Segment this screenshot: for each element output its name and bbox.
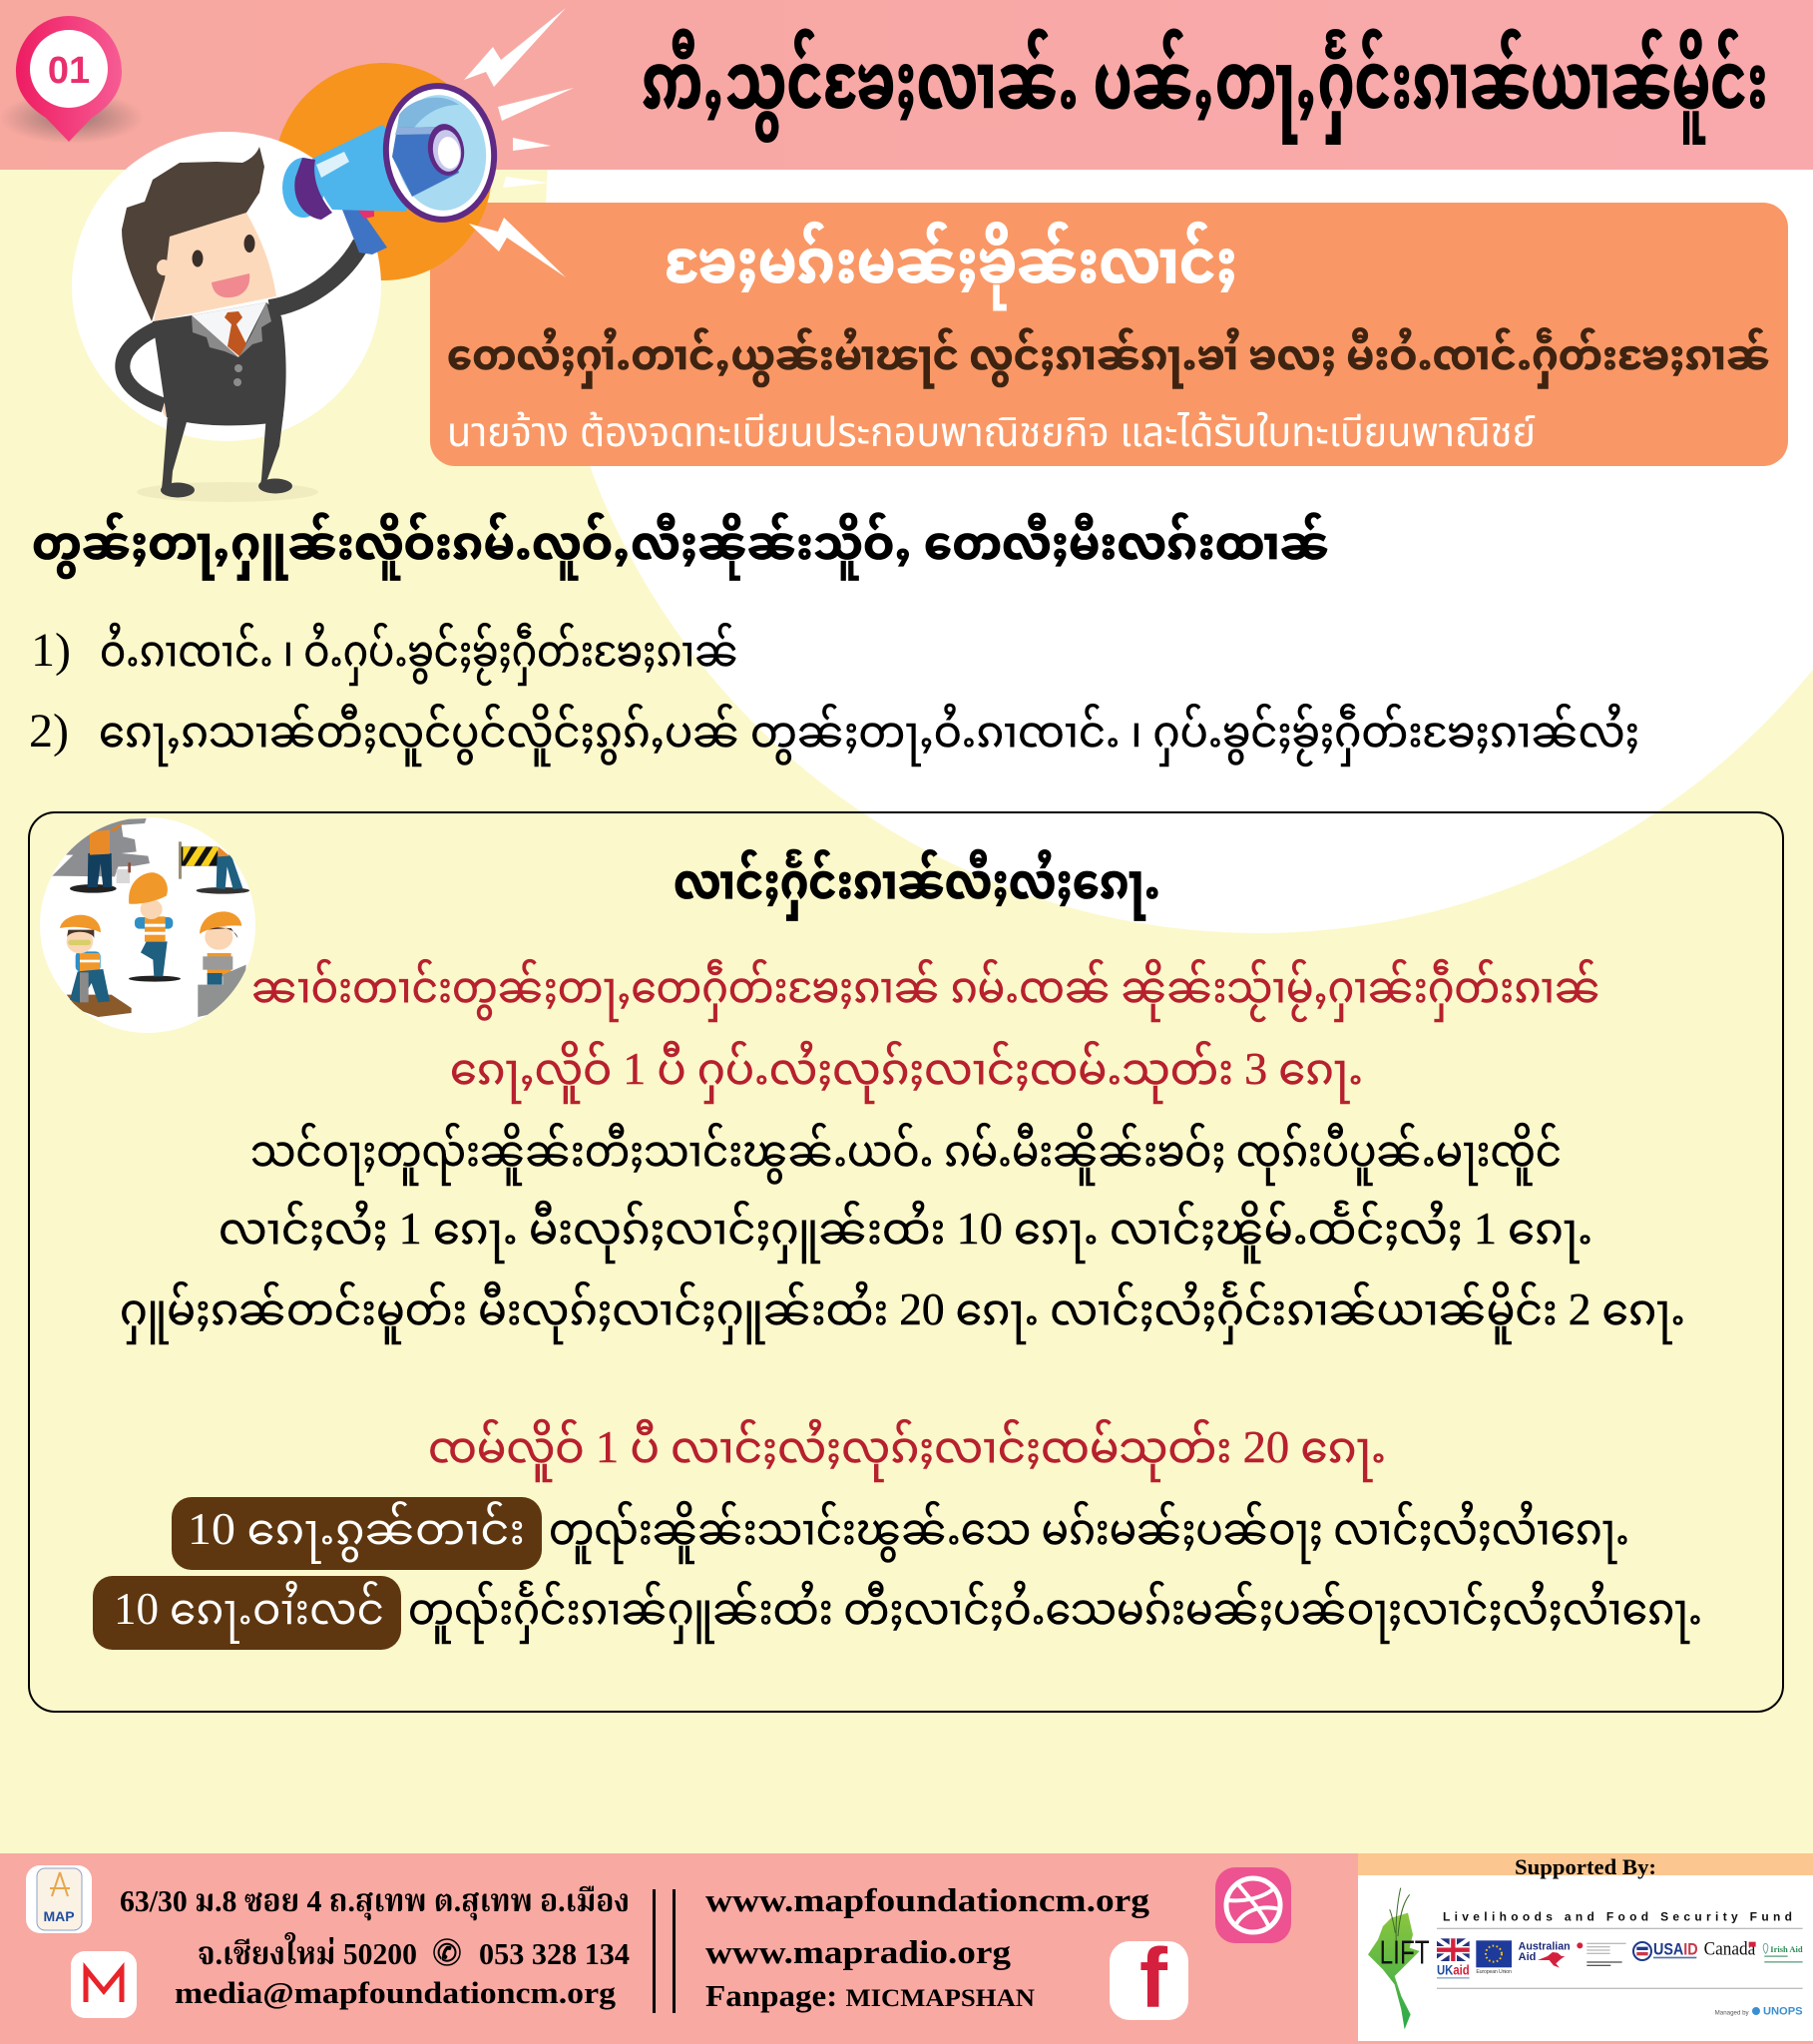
EU logo: European Union	[1476, 1969, 1512, 1975]
Canada logo: Canada	[1704, 1939, 1756, 1960]
raised arm	[269, 244, 361, 308]
red line 1: ၼၢဝ်းတၢင်းတွၼ်ႈတႃႇတေႁဵတ်းၶႄႈၵၢၼ် ၵမ်ႉၸၼ် ၼိုၼ်းသႂ်ၢမႂ်ႇႁၢၼ်းႁဵတ်းၵၢၼ်	[251, 945, 1600, 1039]
LIFT map logo: LIFT	[1380, 1934, 1430, 1971]
panel: supporters	[1358, 1853, 1813, 2041]
supported by label: Supported By:	[1515, 1854, 1656, 1879]
panel: worker rules	[29, 812, 1783, 1712]
pill: next 10: 10 ၵေႃႉဝၢႆးလင်	[114, 1567, 384, 1661]
icon: number pin 01: 01	[48, 50, 90, 92]
body line 1: သင်ဝႃႈတူၺ်းၼိူၼ်းတီႈသၢင်းၽွၼ်ႉယဝ်ႉ ၵမ်ႉမီးၼိူၼ်းၶဝ်ႈ ၸုၵ်းပီပူၼ်ႉမႃးၸိူင်	[250, 1109, 1562, 1203]
body line 2: လၢင်ႈလႆႈ 1 ၵေႃႉ မီးလုၵ်ႈလၢင်ႈႁူၼ်းထႆး 10 ၵေႃႉ လၢင်ႈၽိူမ်ႉထႅင်ႈလႆႈ 1 ၵေႃႉ	[219, 1187, 1592, 1280]
box heading: လၢင်ႈႁႅင်းၵၢၼ်လီႈလႆႈၵေႃႉ	[674, 835, 1160, 940]
orange circle behind megaphone	[274, 63, 492, 280]
ground shadow	[137, 482, 318, 502]
red line 2: ၵေႃႇလိူဝ် 1 ပီ ႁပ်ႉလႆႈလုၵ်ႈလၢင်ႈၸမ်ႉသုတ်း 3 ၵေႃႉ	[450, 1027, 1363, 1121]
red line 3: ၸမ်လိူဝ် 1 ပီ လၢင်ႈလႆႈလုၵ်ႈလၢင်ႈၸမ်သုတ်း 20 ၵေႃႉ	[428, 1405, 1386, 1499]
EU logo	[1476, 1940, 1512, 1975]
icon: sound bolts	[464, 8, 574, 277]
managed by UNOPS	[1715, 2006, 1803, 2018]
icon: MAP logo	[26, 1865, 92, 1933]
footer divider	[653, 1889, 676, 2013]
web links: www.mapradio.org	[705, 1935, 1012, 1971]
Thai line: นายจ้าง ต้องจดทะเบียนประกอบพาณิชยกิจ และได้รับใบทะเบียนพาณิชย์	[447, 409, 1536, 455]
head	[154, 213, 276, 321]
panel: orange requirements	[430, 203, 1788, 466]
illustration: businessman	[122, 147, 361, 497]
fund name: Livelihoods and Food Security Fund	[1443, 1909, 1792, 1923]
left arm	[123, 327, 164, 405]
contact address: ✆	[437, 1941, 457, 1967]
USAID logo	[1633, 1940, 1698, 1960]
requirement line: တေလႆႈႁၢႆႉတၢင်ႇယွၼ်းမႆၢၽႃင် လွင်ႈၵၢၼ်ၵႃႉၶၢႆ ၶလႈ မီးဝႆႉၸၢင်ႉႁဵတ်းၶႄႈၵၢၼ်	[447, 316, 1770, 405]
icon: gmail	[71, 1951, 137, 2018]
pill: first 10: 10 ၵေႃႉၵွၼ်တၢင်း	[188, 1487, 525, 1581]
list item 2: 2)	[29, 705, 69, 758]
Australian Aid logo: Aid	[1519, 1951, 1536, 1963]
list item 1: 1)	[31, 624, 71, 677]
contact address: 63/30 ม.8 ซอย 4 ถ.สุเทพ ต.สุเทพ อ.เมือง	[120, 1883, 630, 1920]
pill 2 sentence: တူၺ်းႁႅင်းၵၢၼ်ႁူၼ်းထႆး တီႈလၢင်ႈဝႆႉသေမၵ်းမၼ်ႈပၼ်ဝႃႈလၢင်ႈလႆႈလႆၢၵေႃႉ	[408, 1567, 1702, 1661]
contact address	[120, 1883, 630, 2010]
header band	[0, 0, 1813, 170]
body line 3: ႁူမ်ႈၵၼ်တင်းမူတ်း မီးလုၵ်ႈလၢင်ႈႁူၼ်းထႆး 20 ၵေႃႉ လၢင်ႈလႆႈႁႅင်းၵၢၼ်ယၢၼ်မိူင်း 2 ၵေႃႉ	[120, 1268, 1685, 1361]
web links	[705, 1883, 1150, 2013]
panel: white circle behind man	[72, 132, 381, 441]
illustration: workers	[40, 817, 255, 1033]
USAID logo: USAID	[1653, 1940, 1698, 1959]
list item 1: ဝႆႉၵၢၸၢင်ႉ ၊ ဝႆႉႁပ်ႉၶွင်ႈၶႂ်ႈႁဵတ်းၶႄႈၵၢၼ်	[100, 609, 738, 703]
Australian Aid logo: Australian	[1519, 1940, 1571, 1952]
heading: documents needed: တွၼ်ႈတႃႇႁူၼ်းလိူဝ်းၵမ်ႉလူဝ်ႇလီႈၼိုၼ်းသိူဝ်ႇ တေလီႈမီးလၵ်းထၢၼ်	[32, 498, 1329, 599]
logo strip	[1368, 1888, 1803, 2029]
icon: facebook: f	[1139, 1931, 1168, 2025]
contact address: 053 328 134	[479, 1936, 630, 1971]
Irish Aid logo	[1763, 1943, 1803, 1963]
legs	[162, 414, 187, 489]
footer band	[0, 1853, 1813, 2044]
icon: facebook	[1110, 1931, 1188, 2025]
web links: Fanpage: MICMAPSHAN	[705, 1978, 1035, 2013]
subtitle: ၶႄႈမၵ်းမၼ်ႈၶိုၼ်းလၢင်ႈ	[665, 204, 1237, 334]
Australian Aid logo	[1519, 1940, 1571, 1968]
managed by UNOPS: Managed by	[1715, 2010, 1749, 2017]
contact address: จ.เชียงใหม่ 50200	[198, 1933, 417, 1971]
managed by UNOPS: UNOPS	[1763, 2006, 1803, 2018]
LIFT map logo	[1368, 1888, 1430, 2029]
icon: megaphone	[282, 77, 504, 255]
icon: number pin 01	[0, 16, 144, 144]
white background circle	[546, 0, 1813, 933]
Irish Aid logo: Irish Aid	[1770, 1944, 1803, 1954]
UK aid logo: UKaid	[1437, 1961, 1470, 1977]
web links: www.mapfoundationcm.org	[705, 1883, 1150, 1919]
icon: dribbble	[1215, 1867, 1291, 1943]
torso	[153, 302, 286, 425]
UK aid logo	[1437, 1938, 1470, 1979]
list item 2: ၵေႃႇၵသၢၼ်တီႈလူင်ပွင်လိူင်ႈၵွၵ်ႇပၼ် တွၼ်ႈတႃႇဝႆႉၵၢၸၢင်ႉ ၊ ႁပ်ႉၶွင်ႈၶႂ်ႈႁဵတ်းၶႄႈၵၢၼ်လႆႈ	[99, 690, 1639, 783]
pill 1 sentence: တူၺ်းၼိူၼ်းသၢင်းၽွၼ်ႉသေ မၵ်းမၼ်ႈပၼ်ဝႃႈ လၢင်ႈလႆႈလႆၢၵေႃႉ	[549, 1487, 1629, 1581]
logos divider	[1437, 1928, 1803, 1989]
icon: MAP logo: MAP	[43, 1908, 75, 1924]
contact address: media@mapfoundationcm.org	[175, 1975, 617, 2010]
Swiss logo	[1577, 1942, 1626, 1966]
